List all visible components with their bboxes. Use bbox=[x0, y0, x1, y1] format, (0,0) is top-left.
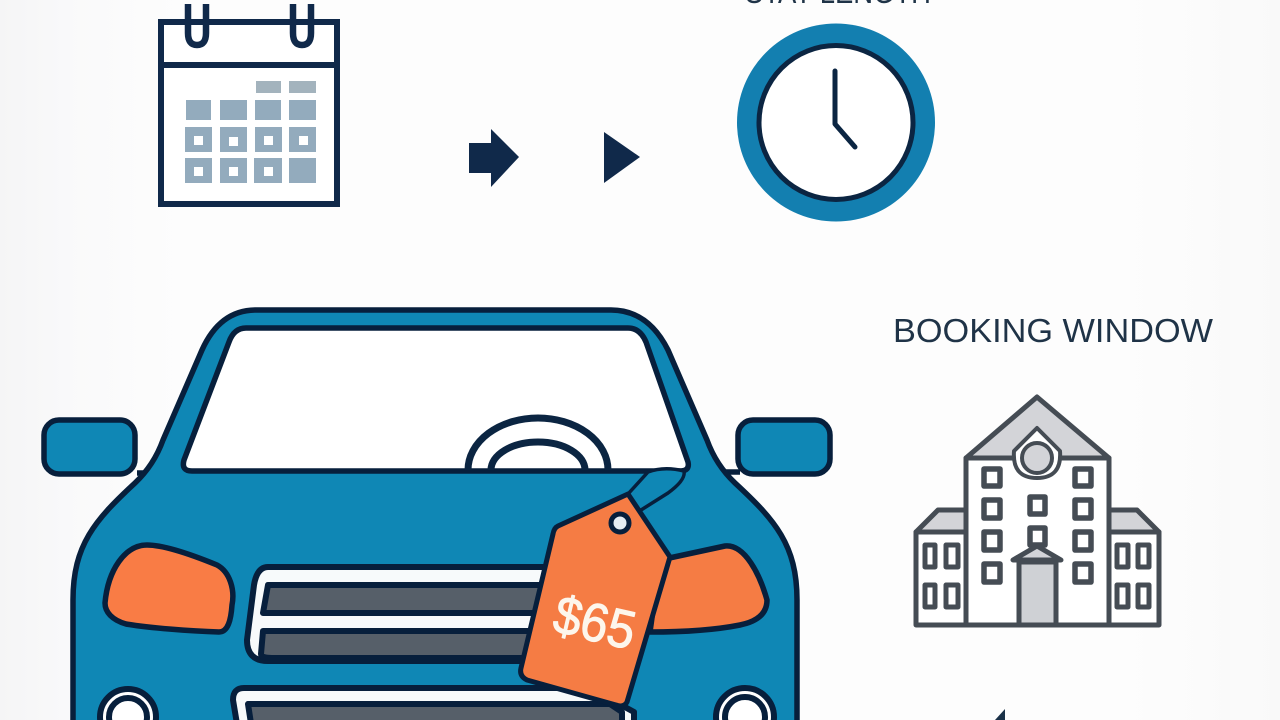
lower grille bbox=[233, 688, 634, 720]
tag hole bbox=[611, 514, 629, 532]
left headlight bbox=[105, 545, 233, 632]
windshield bbox=[183, 328, 688, 471]
right wing bbox=[1109, 510, 1159, 625]
rose window bbox=[1014, 428, 1060, 478]
illustration: car front bbox=[44, 310, 830, 720]
right fog light bbox=[716, 688, 774, 720]
main block bbox=[966, 458, 1109, 625]
left fog light bbox=[100, 689, 156, 720]
car body bbox=[73, 310, 797, 720]
upper grille bbox=[247, 567, 560, 661]
right mirror bbox=[715, 420, 830, 474]
tag body bbox=[521, 494, 670, 706]
icon: clock bbox=[737, 24, 935, 222]
tag string bbox=[622, 469, 684, 522]
left wing bbox=[916, 510, 966, 625]
right headlight bbox=[650, 546, 767, 632]
windows bbox=[984, 469, 1091, 582]
tag price: $65 bbox=[548, 585, 641, 661]
icon: building bbox=[916, 397, 1159, 625]
steering wheel bbox=[468, 418, 608, 470]
door bbox=[1013, 546, 1061, 625]
price tag bbox=[521, 469, 684, 706]
arrow: block arrow right bbox=[469, 129, 519, 187]
arrow: triangle right bbox=[604, 132, 640, 183]
heading: booking window: BOOKING WINDOW bbox=[893, 312, 1214, 349]
left mirror bbox=[44, 420, 155, 474]
arrow: partial triangle at bottom bbox=[995, 709, 1005, 720]
roof gable bbox=[966, 397, 1109, 458]
icon: calendar bbox=[159, 4, 339, 204]
